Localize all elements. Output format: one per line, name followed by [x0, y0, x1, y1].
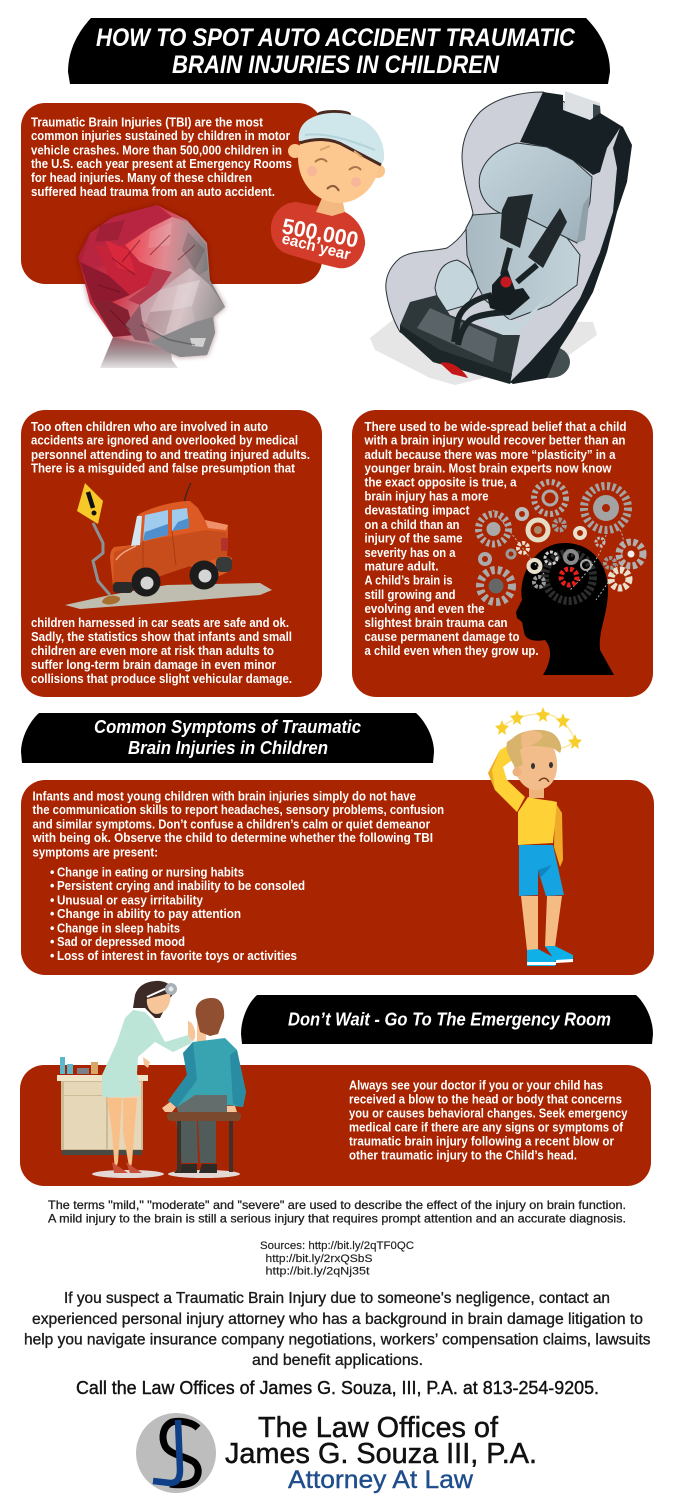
panel: intro: the U.S. each year present at Emergency Rooms	[31, 157, 292, 171]
panel: plasticity belief: a child even when they grow up.	[364, 644, 538, 658]
icon: crashed orange car and road sign	[65, 483, 272, 609]
panel: plasticity belief: adult because there was more “plasticity” in a	[364, 448, 616, 462]
heading: emergency room: Don’t Wait - Go To The Emergency Room	[288, 1010, 611, 1030]
title banner: BRAIN INJURIES IN CHILDREN	[172, 51, 500, 79]
panel: intro: for head injuries. Many of these children	[31, 171, 252, 185]
icon: child with bandaged head	[288, 110, 385, 216]
symptom list: •	[50, 922, 54, 936]
panel: intro: suffered head trauma from an auto accident.	[31, 185, 275, 199]
logo: firm name	[225, 1412, 537, 1494]
panel: emergency advice: other traumatic injury to the Child’s head.	[349, 1148, 577, 1162]
symptom list: Persistent crying and inability to be consoled	[57, 879, 305, 893]
badge: 500,000 each year: each year	[280, 230, 352, 264]
panel: plasticity belief: brain injury has a more	[364, 490, 489, 504]
panel: misconception about car seats: accidents are ignored and overlooked by medical	[31, 434, 298, 448]
title banner	[68, 18, 610, 84]
icon: head silhouette with gears	[478, 482, 643, 675]
panel: plasticity belief: There used to be wide-spread belief that a child	[364, 420, 626, 434]
note: injury severity: A mild injury to the brain is still a serious injury that requires prompt attention and an accurate diagnosis.	[48, 1212, 626, 1226]
symptom list: Loss of interest in favorite toys or activities	[57, 949, 297, 963]
panel: misconception about car seats: Sadly, the statistics show that infants and small	[31, 630, 292, 644]
sources: Sources: http://bit.ly/2qTF0QC	[260, 1240, 414, 1252]
panel: emergency advice: received a blow to the head or body that concerns	[349, 1092, 622, 1106]
intro text: Infants and most young children with brain injuries simply do not have	[32, 790, 416, 804]
logo: JS monogram	[136, 1413, 216, 1493]
panel: intro: common injuries sustained by children in motor	[31, 129, 290, 143]
symptom list: •	[50, 879, 54, 893]
sources	[260, 1240, 414, 1278]
symptom list	[50, 866, 305, 963]
panel: misconception about car seats: collisions that produce slight vehicular damage.	[31, 672, 292, 686]
panel: misconception about car seats	[21, 410, 322, 697]
intro text: with being ok. Observe the child to determine whether the following TBI	[32, 831, 433, 845]
symptom list: Unusual or easy irritability	[57, 894, 203, 908]
note: injury severity	[48, 1198, 626, 1226]
symptom list: Change in sleep habits	[57, 922, 180, 936]
panel: plasticity belief: the exact opposite is true, a	[364, 476, 517, 490]
symptom list: Change in ability to pay attention	[57, 907, 241, 921]
medicine cabinet	[57, 1057, 148, 1155]
panel: misconception about car seats: children are even more at risk than adults to	[31, 644, 274, 658]
title banner: HOW TO SPOT AUTO ACCIDENT TRAUMATIC	[96, 24, 576, 52]
call to action paragraph	[24, 1290, 651, 1369]
call to action paragraph: experienced personal injury attorney who has a background in brain damage litigation to	[32, 1311, 643, 1328]
panel: plasticity belief: on a child than an	[364, 518, 460, 532]
panel: symptoms	[21, 780, 654, 975]
panel: plasticity belief: slightest brain trauma can	[364, 616, 508, 630]
panel: misconception about car seats: children harnessed in car seats are safe and ok.	[31, 616, 289, 630]
symptom list: •	[50, 935, 54, 949]
symptom list: •	[50, 866, 54, 880]
intro text: the communication skills to report headaches, sensory problems, confusion	[32, 803, 444, 817]
icon: doctor examining patient	[57, 981, 246, 1178]
icon: child car seat	[370, 91, 632, 385]
heading: common symptoms	[21, 713, 434, 763]
heading: common symptoms: Brain Injuries in Children	[128, 738, 328, 758]
symptom list: Change in eating or nursing habits	[57, 866, 244, 880]
note: injury severity: The terms "mild," "moderate" and "severe" are used to describe the effect of the injury on brain function.	[48, 1198, 626, 1212]
panel: misconception about car seats: There is a misguided and false presumption that	[31, 462, 296, 476]
icon: dizzy boy	[488, 707, 582, 966]
heading: common symptoms: Common Symptoms of Traumatic	[94, 717, 361, 737]
panel: misconception about car seats: suffer long-term brain damage in even minor	[31, 658, 276, 672]
panel: misconception about car seats: Too often children who are involved in auto	[31, 420, 268, 434]
panel: plasticity belief: devastating impact	[364, 504, 470, 518]
call to action paragraph: If you suspect a Traumatic Brain Injury due to someone's negligence, contact an	[64, 1290, 610, 1307]
panel: emergency advice: Always see your doctor if you or your child has	[349, 1078, 603, 1092]
call to action paragraph: and benefit applications.	[252, 1352, 423, 1369]
panel: plasticity belief: mature adult.	[364, 560, 438, 574]
panel: misconception about car seats: personnel attending to and treating injured adults.	[31, 448, 310, 462]
call to action paragraph: help you navigate insurance company negotiations, workers’ compensation claims, lawsuits	[24, 1332, 651, 1348]
phone call line: Call the Law Offices of James G. Souza, III, P.A. at 813-254-9205.	[76, 1378, 599, 1398]
panel: emergency advice: medical care if there are any signs or symptoms of	[349, 1120, 624, 1134]
badge: 500,000 each year	[271, 202, 365, 268]
panel: plasticity belief: severity has on a	[364, 546, 456, 560]
panel: plasticity belief: evolving and even the	[364, 602, 485, 616]
panel: emergency advice: you or causes behavioral changes. Seek emergency	[349, 1106, 628, 1120]
panel: plasticity belief: younger brain. Most brain experts now know	[364, 462, 612, 476]
panel: emergency advice	[20, 1065, 651, 1186]
panel: plasticity belief: injury of the same	[364, 532, 463, 546]
panel: plasticity belief: still growing and	[364, 588, 456, 602]
symptom list: •	[50, 907, 54, 921]
symptom list: Sad or depressed mood	[57, 935, 185, 949]
symptom list: •	[50, 949, 54, 963]
intro text: symptoms are present:	[32, 846, 158, 860]
panel: intro	[21, 103, 322, 284]
panel: intro: vehicle crashes. More than 500,000 children in	[31, 144, 282, 158]
panel: plasticity belief: with a brain injury would recover better than an	[364, 434, 626, 448]
logo: firm name: The Law Offices of	[258, 1412, 499, 1444]
logo: firm name: James G. Souza III, P.A.	[225, 1438, 537, 1470]
intro text: and similar symptoms. Don’t confuse a children’s calm or quiet demeanor	[32, 818, 430, 832]
intro text	[32, 790, 444, 860]
sources: http://bit.ly/2rxQSbS	[266, 1253, 372, 1265]
panel: plasticity belief	[352, 410, 653, 697]
icon: crumpled head	[78, 205, 225, 368]
sources: http://bit.ly/2qNj35t	[266, 1266, 370, 1278]
badge: 500,000 each year: 500,000	[280, 213, 360, 253]
panel: plasticity belief: cause permanent damage to	[364, 630, 520, 644]
logo: firm name: Attorney At Law	[288, 1466, 474, 1494]
panel: intro: Traumatic Brain Injuries (TBI) are the most	[31, 116, 264, 130]
panel: emergency advice: traumatic brain injury following a recent blow or	[349, 1134, 614, 1148]
symptom list: •	[50, 894, 54, 908]
panel: plasticity belief: A child’s brain is	[364, 574, 453, 588]
heading: emergency room	[241, 995, 653, 1044]
